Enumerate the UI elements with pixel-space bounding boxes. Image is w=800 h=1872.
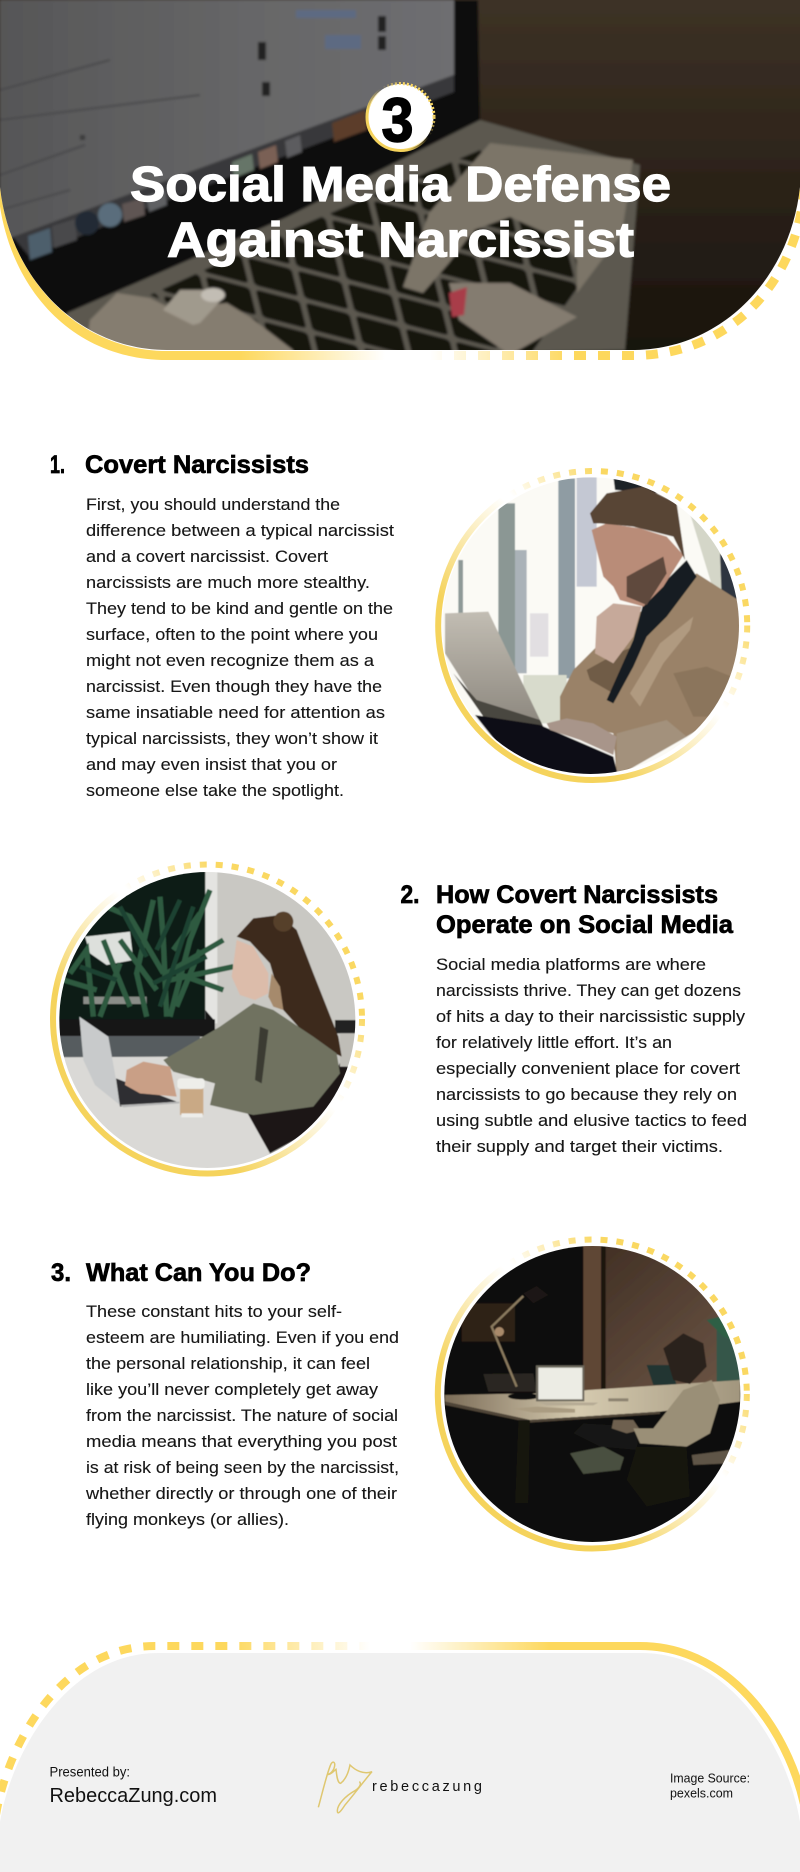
section 1 heading: 1. xyxy=(50,451,65,479)
section 3 text: like you’ll never completely get away xyxy=(86,1380,379,1399)
title: Social Media Defense xyxy=(130,158,671,212)
section 1 text: They tend to be kind and gentle on the xyxy=(86,599,393,618)
section 2 heading: Operate on Social Media xyxy=(436,911,734,939)
section 1 text: and a covert narcissist. Covert xyxy=(86,547,328,566)
section 2 heading: 2. xyxy=(400,881,420,909)
section 2 text: of hits a day to their narcissistic supply xyxy=(436,1007,746,1026)
section 1 text: and may even insist that you or xyxy=(86,755,337,774)
section 2 ring xyxy=(53,864,362,1174)
image source: Image Source: xyxy=(670,1770,750,1786)
section 3 text: esteem are humiliating. Even if you end xyxy=(86,1328,399,1347)
section 1 text: typical narcissists, they won’t show it xyxy=(86,729,378,748)
section 3 photo: person at desk in dark office xyxy=(440,1243,747,1550)
badge: number 3: 3 xyxy=(382,86,414,156)
section 2 heading: How Covert Narcissists xyxy=(436,881,718,909)
section 2 text: narcissists to go because they rely on xyxy=(436,1085,737,1104)
footer border: dashed left, solid right xyxy=(0,1646,800,1815)
section 1 text: First, you should understand the xyxy=(86,495,340,514)
section 1 text: difference between a typical narcissist xyxy=(86,521,394,540)
section 1 text: narcissist. Even though they have the xyxy=(86,677,382,696)
section 1 text: someone else take the spotlight. xyxy=(86,781,344,800)
title: Against Narcissist xyxy=(167,214,634,268)
section 3 text: flying monkeys (or allies). xyxy=(86,1510,289,1529)
section 1 text: same insatiable need for attention as xyxy=(86,703,385,722)
presented by: RebeccaZung.com xyxy=(50,1785,217,1807)
section 2 text: using subtle and elusive tactics to feed xyxy=(436,1111,747,1130)
section 3 heading: What Can You Do? xyxy=(86,1259,311,1287)
section 2 text: narcissists thrive. They can get dozens xyxy=(436,981,741,1000)
header photo: hands typing on a laptop xyxy=(0,0,800,360)
title xyxy=(130,158,671,268)
presented by: Presented by: xyxy=(50,1764,130,1780)
section 1 text: surface, often to the point where you xyxy=(86,625,378,644)
badge: number 3 xyxy=(367,84,434,156)
section 3 text: is at risk of being seen by the narcissist, xyxy=(86,1458,399,1477)
image source xyxy=(670,1770,750,1800)
section 2 heading xyxy=(400,881,734,939)
section 2 text: Social media platforms are where xyxy=(436,955,706,974)
logo: rebeccazung xyxy=(318,1762,482,1813)
section 3 text: whether directly or through one of their xyxy=(85,1484,397,1503)
section 3 text: from the narcissist. The nature of social xyxy=(86,1406,398,1425)
section 2 photo: woman working at laptop xyxy=(53,870,360,1177)
section 2 text: for relatively little effort. It’s an xyxy=(436,1033,672,1052)
section 1 photo: man thinking at laptop xyxy=(433,473,750,780)
section 1 text: might not even recognize them as a xyxy=(86,651,375,670)
section 3 heading: 3. xyxy=(51,1259,71,1287)
section 1 ring xyxy=(438,471,747,780)
section 3 text: These constant hits to your self- xyxy=(86,1302,342,1321)
section 2 text: especially convenient place for covert xyxy=(436,1059,740,1078)
section 3 text: media means that everything you post xyxy=(86,1432,397,1451)
section 1 heading: Covert Narcissists xyxy=(85,451,309,479)
section 3 text: the personal relationship, it can feel xyxy=(86,1354,370,1373)
presented by xyxy=(50,1764,217,1807)
logo: rebeccazung: rebeccazung xyxy=(372,1779,482,1795)
section 1 text: narcissists are much more stealthy. xyxy=(86,573,370,592)
section 2 text xyxy=(436,955,747,1156)
section 2 text: their supply and target their victims. xyxy=(436,1137,723,1156)
footer panel xyxy=(0,1653,800,1872)
section 3 text xyxy=(85,1302,399,1529)
section 1 text xyxy=(86,495,394,800)
header border: solid left, dashed right xyxy=(0,187,800,360)
image source: pexels.com xyxy=(670,1786,733,1800)
section 3 ring xyxy=(438,1240,747,1548)
